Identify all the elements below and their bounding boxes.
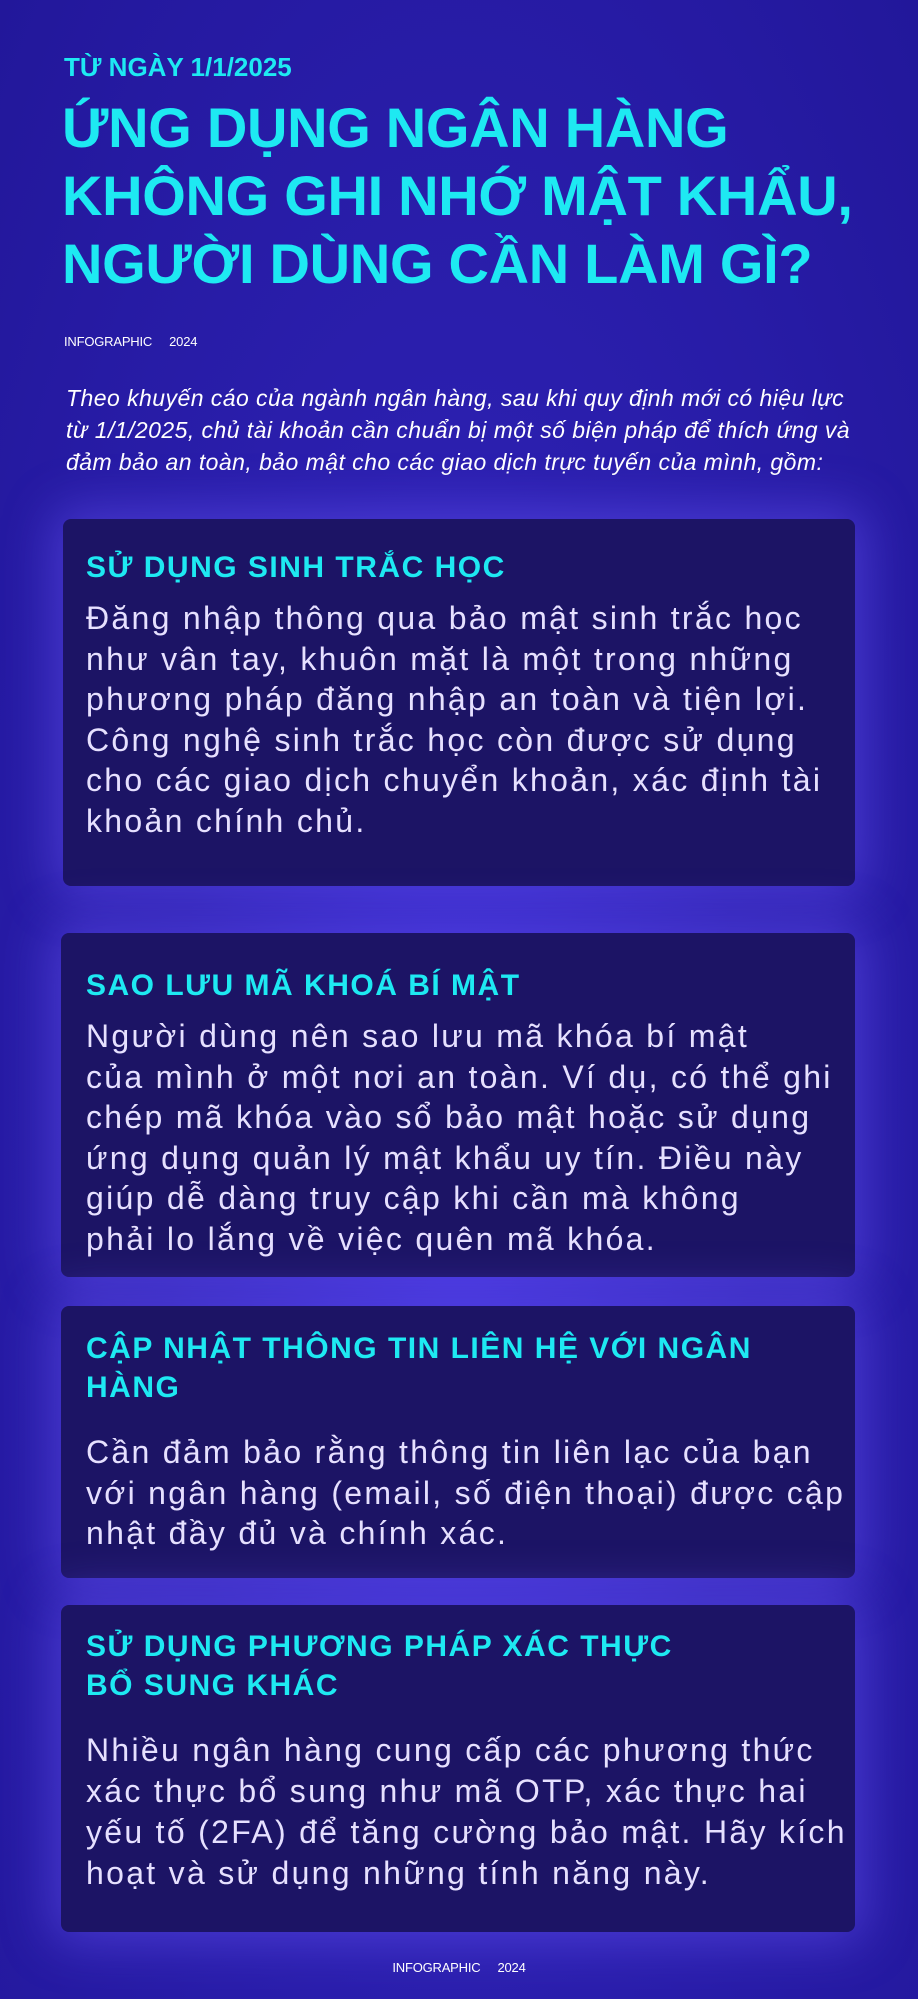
- heading: extra auth: SỬ DỤNG PHƯƠNG PHÁP XÁC THỰC: [86, 1630, 673, 1663]
- panel: update contact: [61, 1306, 855, 1578]
- text: update contact: Cần đảm bảo rằng thông tin liên lạc của bạn: [86, 1434, 813, 1470]
- text: update contact: [86, 1434, 845, 1551]
- text: extra auth: Nhiều ngân hàng cung cấp các phương thức: [86, 1732, 815, 1768]
- text: update contact: nhật đầy đủ và chính xác.: [86, 1515, 508, 1551]
- title: [62, 96, 853, 295]
- panel: biometrics: [63, 519, 855, 886]
- text: extra auth: hoạt và sử dụng những tính năng này.: [86, 1855, 711, 1891]
- text: update contact: với ngân hàng (email, số điện thoại) được cập: [86, 1474, 845, 1510]
- tag: infographic 2024: INFOGRAPHIC 2024: [64, 334, 197, 349]
- text: backup key: phải lo lắng về việc quên mã khóa.: [86, 1220, 657, 1256]
- footer: INFOGRAPHIC 2024: [392, 1960, 526, 1975]
- heading: update contact: CẬP NHẬT THÔNG TIN LIÊN HỆ VỚI NGÂN: [86, 1332, 752, 1365]
- text: biometrics: Công nghệ sinh trắc học còn được sử dụng: [86, 722, 797, 758]
- text: biometrics: Đăng nhập thông qua bảo mật sinh trắc học: [86, 600, 803, 636]
- text: biometrics: như vân tay, khuôn mặt là một trong những: [86, 640, 794, 676]
- text: biometrics: cho các giao dịch chuyển khoản, xác định tài: [86, 762, 822, 798]
- subtitle: TỪ NGÀY 1/1/2025: [64, 52, 292, 82]
- text: backup key: chép mã khóa vào sổ bảo mật hoặc sử dụng: [86, 1099, 811, 1135]
- heading: extra auth: BỔ SUNG KHÁC: [86, 1669, 339, 1702]
- text: extra auth: yếu tố (2FA) để tăng cường bảo mật. Hãy kích: [86, 1814, 847, 1850]
- text: backup key: của mình ở một nơi an toàn. Ví dụ, có thể ghi: [86, 1058, 833, 1094]
- text: extra auth: xác thực bổ sung như mã OTP, xác thực hai: [86, 1773, 808, 1809]
- text: backup key: giúp dễ dàng truy cập khi cần mà không: [86, 1180, 741, 1216]
- panel: backup key: [61, 933, 855, 1277]
- text: biometrics: phương pháp đăng nhập an toàn và tiện lợi.: [86, 681, 808, 717]
- title: NGƯỜI DÙNG CẦN LÀM GÌ?: [62, 232, 812, 295]
- text: extra auth: [86, 1732, 847, 1891]
- heading: biometrics: SỬ DỤNG SINH TRẮC HỌC: [86, 551, 506, 584]
- text: backup key: Người dùng nên sao lưu mã khóa bí mật: [86, 1018, 749, 1054]
- intro text: đảm bảo an toàn, bảo mật cho các giao dịch trực tuyến của mình, gồm:: [66, 449, 823, 475]
- intro text: [66, 385, 850, 475]
- text: biometrics: [86, 600, 822, 838]
- title: KHÔNG GHI NHỚ MẬT KHẨU,: [62, 164, 853, 227]
- heading: backup key: SAO LƯU MÃ KHOÁ BÍ MẬT: [86, 969, 521, 1002]
- text: backup key: [86, 1018, 833, 1256]
- heading: update contact: HÀNG: [86, 1371, 180, 1404]
- heading: extra auth: [86, 1630, 673, 1702]
- heading: update contact: [86, 1331, 752, 1404]
- panel: extra auth: [61, 1605, 855, 1932]
- text: biometrics: khoản chính chủ.: [86, 802, 367, 838]
- text: backup key: ứng dụng quản lý mật khẩu uy tín. Điều này: [86, 1140, 804, 1176]
- intro text: Theo khuyến cáo của ngành ngân hàng, sau khi quy định mới có hiệu lực: [66, 385, 844, 411]
- intro text: từ 1/1/2025, chủ tài khoản cần chuẩn bị một số biện pháp để thích ứng và: [66, 417, 850, 443]
- title: ỨNG DỤNG NGÂN HÀNG: [62, 96, 728, 159]
